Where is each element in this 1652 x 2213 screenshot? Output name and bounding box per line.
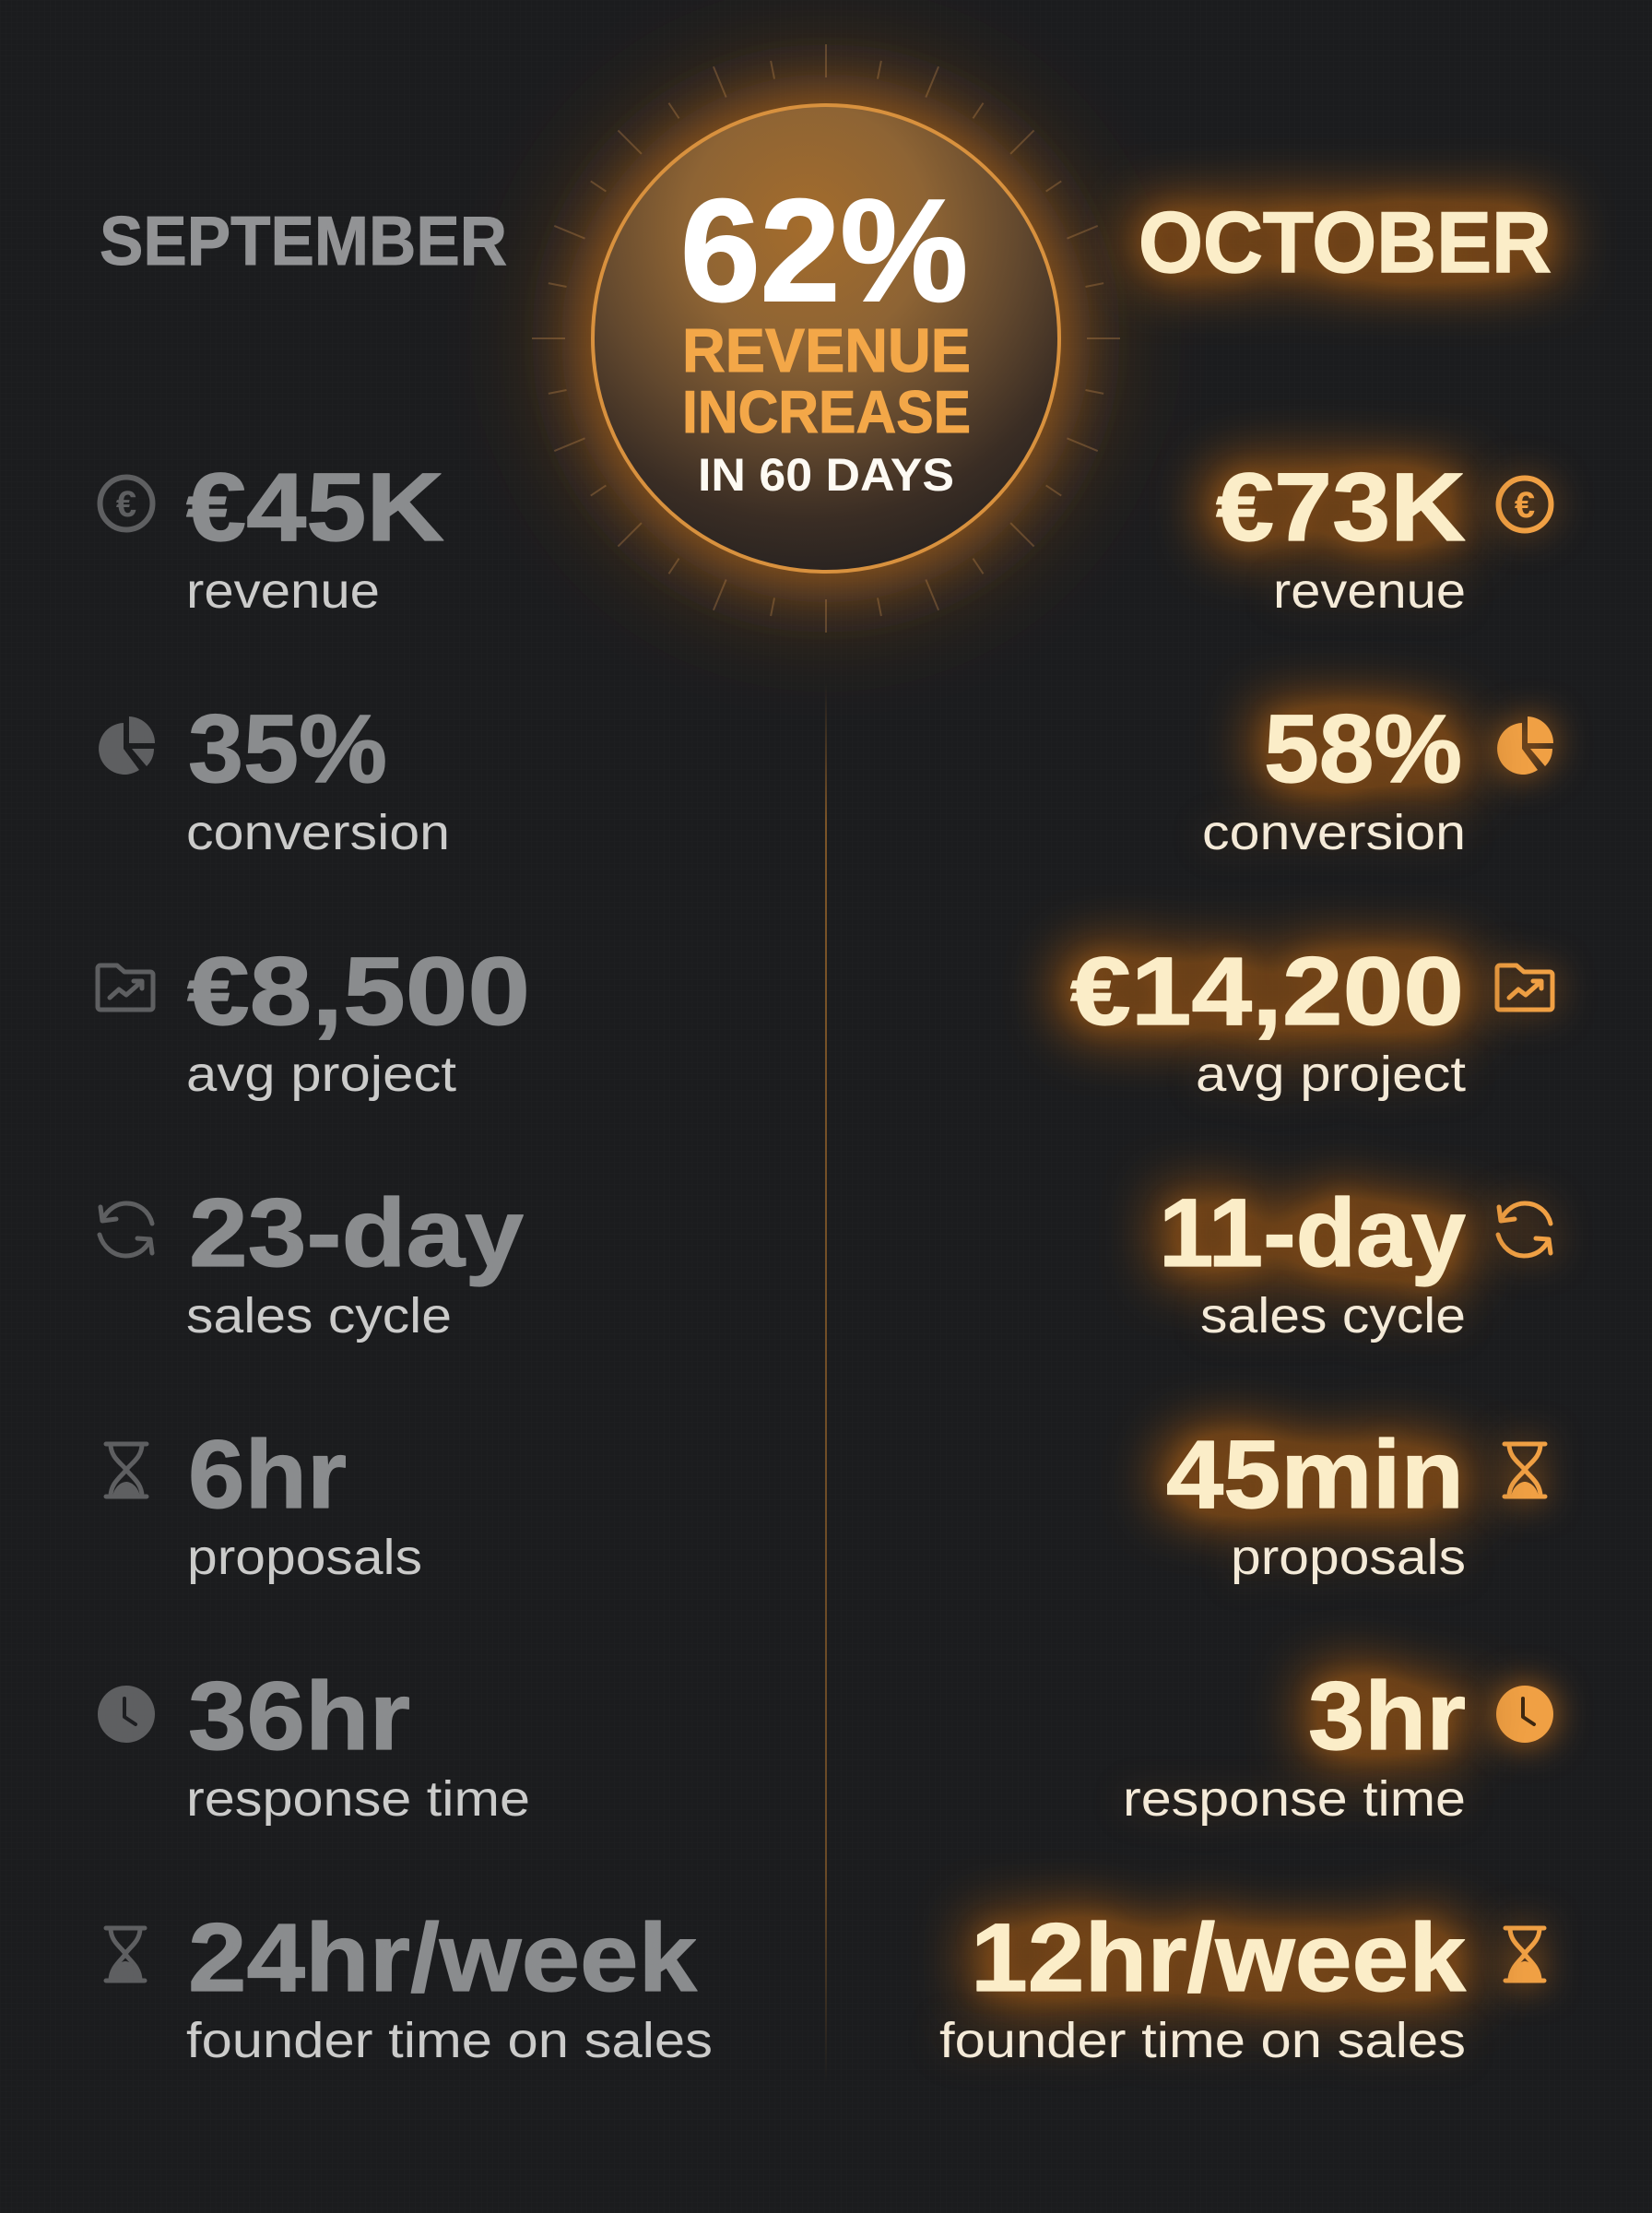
value: €73K bbox=[1216, 454, 1466, 562]
panel: October column bbox=[939, 194, 1553, 2068]
icon: hourglass bbox=[106, 1444, 147, 1497]
icon: euro coin bbox=[1499, 478, 1551, 531]
icon: hourglass bbox=[1504, 1444, 1545, 1497]
row: conversion bbox=[99, 695, 450, 860]
label: revenue bbox=[186, 563, 380, 619]
icon: pie chart bbox=[99, 716, 155, 775]
label: founder time on sales bbox=[939, 2013, 1466, 2068]
row: sales cycle bbox=[1159, 1179, 1551, 1343]
icon: pie chart bbox=[1497, 716, 1553, 775]
badge disc bbox=[593, 105, 1059, 572]
row: revenue bbox=[100, 454, 444, 619]
headline 62%: 62% bbox=[680, 170, 968, 332]
label: sales cycle bbox=[1200, 1288, 1466, 1343]
label: conversion bbox=[186, 805, 450, 860]
row: avg project bbox=[98, 938, 530, 1102]
label: response time bbox=[1123, 1771, 1466, 1827]
value: 6hr bbox=[188, 1421, 347, 1529]
panel: September column bbox=[98, 202, 713, 2068]
icon: euro coin bbox=[100, 478, 153, 529]
value: 36hr bbox=[188, 1663, 410, 1770]
REVENUE label: REVENUE bbox=[682, 316, 971, 385]
value: €8,500 bbox=[187, 938, 530, 1046]
panel: center badge bbox=[531, 43, 1121, 633]
icon: hourglass full bbox=[106, 1928, 145, 1981]
value: €45K bbox=[186, 454, 444, 562]
badge halo bbox=[581, 93, 1071, 584]
row: revenue bbox=[1216, 454, 1551, 619]
icon: refresh arrows bbox=[100, 1203, 152, 1256]
label: sales cycle bbox=[186, 1288, 452, 1343]
label: conversion bbox=[1202, 805, 1466, 860]
radial tick marks bbox=[532, 44, 1120, 633]
row: proposals bbox=[106, 1421, 422, 1585]
row: response time bbox=[98, 1663, 530, 1827]
value: 11-day bbox=[1159, 1179, 1466, 1287]
label: revenue bbox=[1273, 563, 1466, 619]
INCREASE label: INCREASE bbox=[682, 378, 971, 445]
heading: October: OCTOBER bbox=[1139, 194, 1552, 290]
icon: clock bbox=[1496, 1686, 1553, 1743]
icon: hourglass full bbox=[1505, 1928, 1544, 1981]
label: founder time on sales bbox=[186, 2013, 713, 2068]
row: founder time on sales bbox=[106, 1904, 713, 2068]
label: proposals bbox=[1231, 1530, 1466, 1585]
IN 60 DAYS label: IN 60 DAYS bbox=[698, 449, 954, 501]
heading: September: SEPTEMBER bbox=[100, 202, 507, 279]
icon: folder with trend bbox=[98, 965, 153, 1010]
center divider line bbox=[825, 682, 827, 2084]
value: €14,200 bbox=[1070, 938, 1464, 1046]
row: proposals bbox=[1166, 1421, 1545, 1585]
icon: refresh arrows bbox=[1498, 1203, 1551, 1256]
value: 35% bbox=[188, 695, 387, 803]
icon: folder with trend bbox=[1497, 965, 1552, 1010]
value: 23-day bbox=[189, 1179, 524, 1287]
value: 58% bbox=[1264, 695, 1462, 803]
value: 3hr bbox=[1308, 1663, 1466, 1770]
row: founder time on sales bbox=[939, 1904, 1544, 2068]
icon: euro coin: € bbox=[1515, 485, 1535, 526]
value: 12hr/week bbox=[971, 1904, 1467, 2012]
icon: clock bbox=[98, 1686, 155, 1743]
row: conversion bbox=[1202, 695, 1553, 860]
label: avg project bbox=[186, 1047, 456, 1102]
row: sales cycle bbox=[100, 1179, 524, 1343]
value: 45min bbox=[1166, 1421, 1464, 1529]
row: avg project bbox=[1070, 938, 1552, 1102]
row: response time bbox=[1123, 1663, 1553, 1827]
value: 24hr/week bbox=[188, 1904, 698, 2012]
label: proposals bbox=[187, 1530, 422, 1585]
label: response time bbox=[186, 1771, 530, 1827]
icon: euro coin: € bbox=[116, 484, 136, 525]
ambient glow bbox=[531, 43, 1121, 633]
label: avg project bbox=[1196, 1047, 1466, 1102]
